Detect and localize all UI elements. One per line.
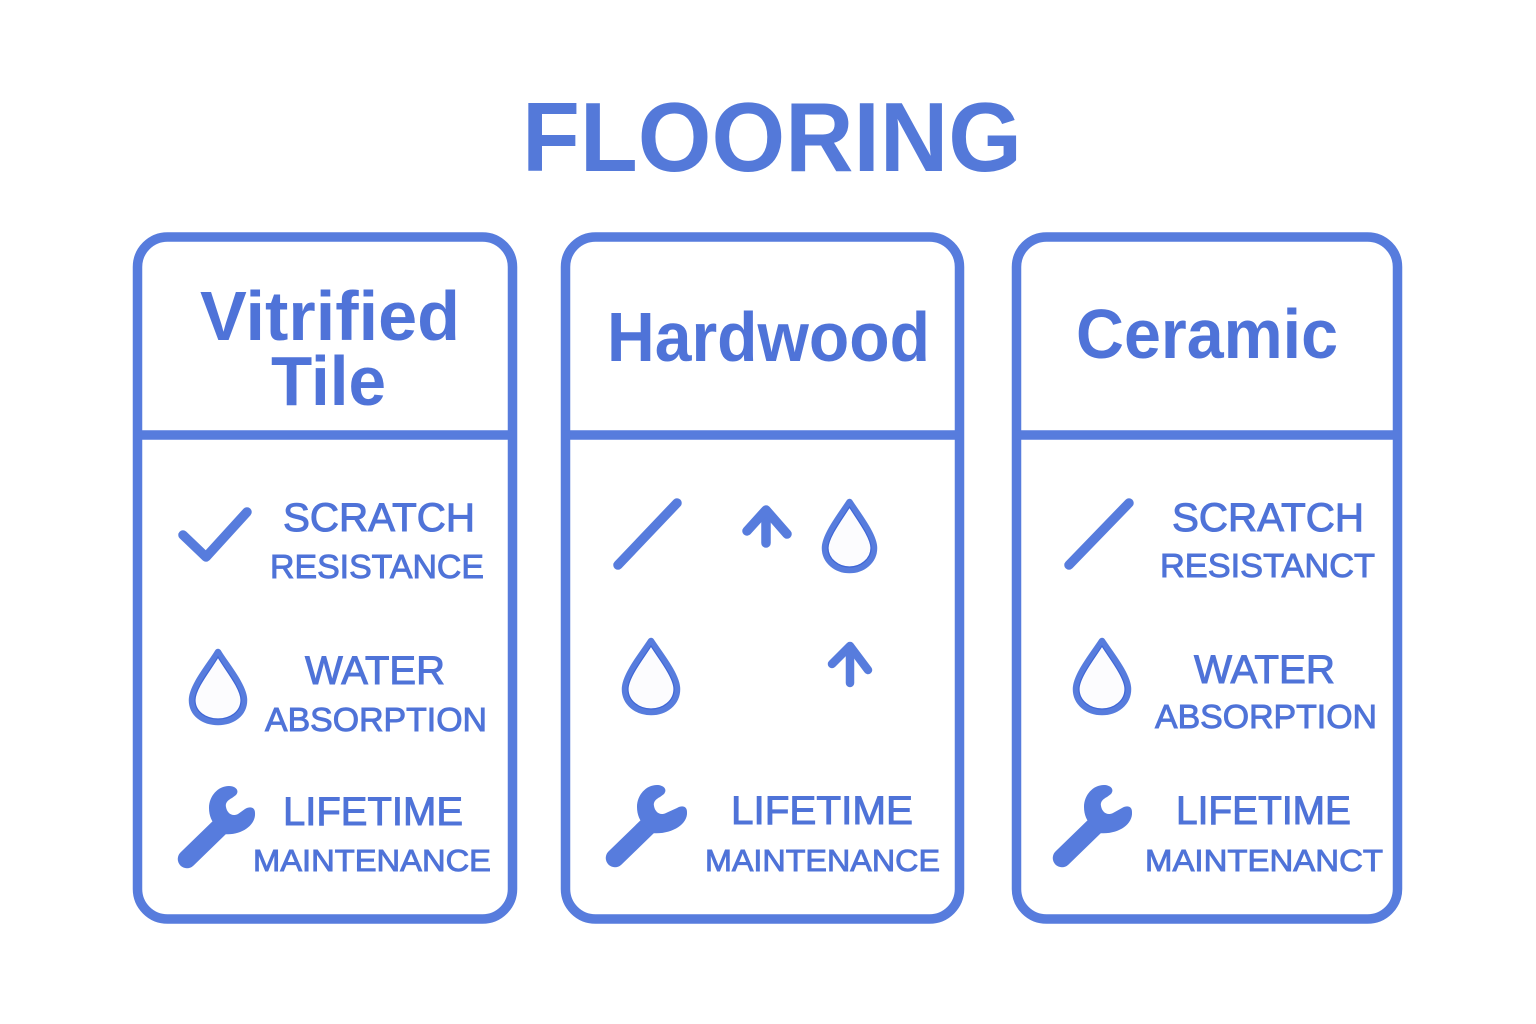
label: scratch resistance: SCRATCH [283, 496, 475, 540]
label: scratch resistant: SCRATCH [1172, 496, 1364, 540]
panel: hardwood [566, 237, 960, 919]
panel: vitrified tile [138, 237, 512, 919]
label: lifetime maintenance: LIFETIME [283, 790, 463, 834]
label: lifetime maintenance: MAINTENANCE [705, 843, 940, 878]
label: water absorption: ABSORPTION [265, 701, 487, 738]
title: FLOORING [522, 82, 1022, 192]
icon: scratch slash [1069, 503, 1129, 565]
label: lifetime maintenance: LIFETIME [1176, 789, 1351, 833]
label: lifetime maintenance: LIFETIME [731, 789, 913, 833]
label: scratch resistant: RESISTANCT [1160, 547, 1375, 584]
icon: up arrow [747, 510, 787, 543]
label: scratch resistance: RESISTANCE [270, 548, 484, 585]
icon: check mark [183, 512, 247, 557]
heading: hardwood: Hardwood [607, 298, 930, 376]
icon: water drop [192, 652, 244, 722]
label: lifetime maintenance: MAINTENANCT [1145, 843, 1383, 878]
label: lifetime maintenance: MAINTENANCE [253, 843, 491, 878]
label: water absorption [265, 649, 487, 738]
label: water absorption: WATER [1194, 648, 1335, 692]
heading: vitrified tile [200, 277, 460, 420]
icon: up arrow [832, 646, 868, 683]
label: scratch resistant [1160, 496, 1375, 584]
icon: wrench [615, 785, 687, 858]
label: scratch resistance [270, 496, 484, 585]
icon: water drop [1076, 641, 1128, 712]
panel: ceramic [1016, 237, 1398, 919]
icon: wrench [187, 786, 255, 859]
label: water absorption: WATER [305, 649, 445, 693]
label: lifetime maintenance [705, 789, 940, 878]
icon: wrench [1062, 785, 1132, 858]
icon: scratch slash [618, 503, 677, 565]
icon: water drop [625, 641, 677, 712]
heading: ceramic: Ceramic [1076, 295, 1338, 373]
label: lifetime maintenance [1145, 789, 1383, 878]
label: water absorption: ABSORPTION [1155, 698, 1377, 735]
heading: vitrified tile: Tile [271, 342, 386, 420]
label: water absorption [1155, 648, 1377, 735]
icon: water drop [825, 502, 874, 570]
heading: vitrified tile: Vitrified [200, 277, 460, 355]
label: lifetime maintenance [253, 790, 491, 878]
